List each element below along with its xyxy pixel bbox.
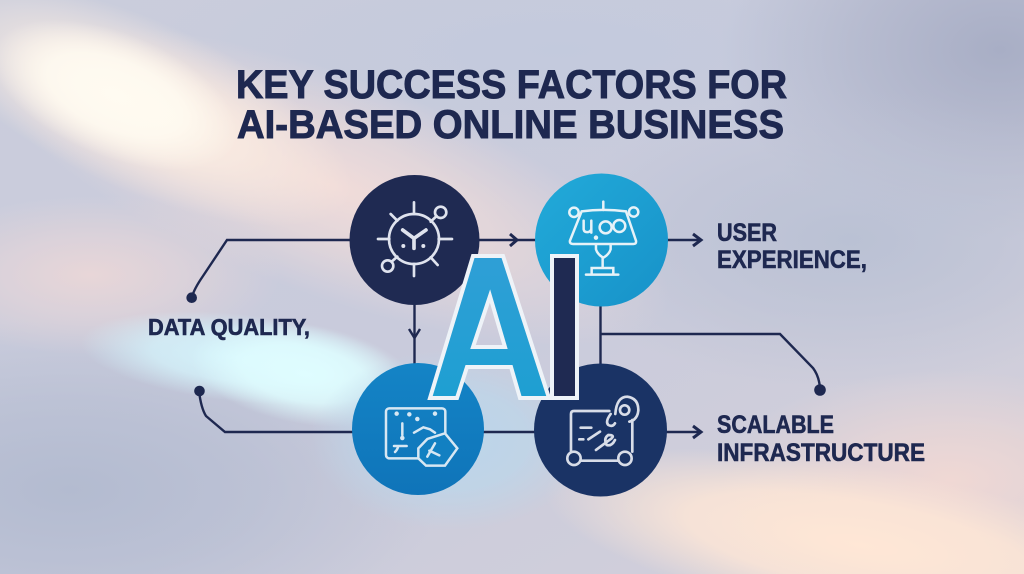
icon: scalable nodes [567,397,638,465]
label: user experience [717,219,867,274]
connector: bottom circles [483,431,535,433]
letter A [430,256,549,398]
arrow: top-right circle to user experience [667,234,701,246]
big letters: AI [430,256,577,398]
label: scalable infrastructure: INFRASTRUCTURE [717,439,925,467]
arrow: top-left circle down to bottom-left circle [409,304,420,366]
title: AI-BASED ONLINE BUSINESS [237,103,784,147]
label: scalable infrastructure [717,411,925,467]
label: user experience: EXPERIENCE, [717,246,867,274]
arrow: top-left circle to top-right circle [478,234,536,246]
icon: network hub [378,202,452,276]
node: data circle with network icon [350,175,480,305]
node: strategy circle with board icon [352,363,484,495]
label: data quality: DATA QUALITY, [148,314,310,340]
icon: robot lamp [569,202,638,275]
node: infrastructure circle with scalable icon [534,364,667,496]
icon: board and shield [386,408,457,466]
label: user experience: USER [717,219,777,247]
label: scalable infrastructure: SCALABLE [717,411,834,439]
letter I [552,256,577,398]
node: user experience circle with robot icon [535,174,668,306]
connector: data quality to top-left circle [186,240,352,303]
title: KEY SUCCESS FACTORS FOR [236,63,787,107]
arrow: bottom-right circle to scalable infrastructure [666,426,701,438]
connector: data quality to bottom-left circle [194,386,354,432]
connector: right circles to dot [600,304,826,396]
title [236,63,787,147]
